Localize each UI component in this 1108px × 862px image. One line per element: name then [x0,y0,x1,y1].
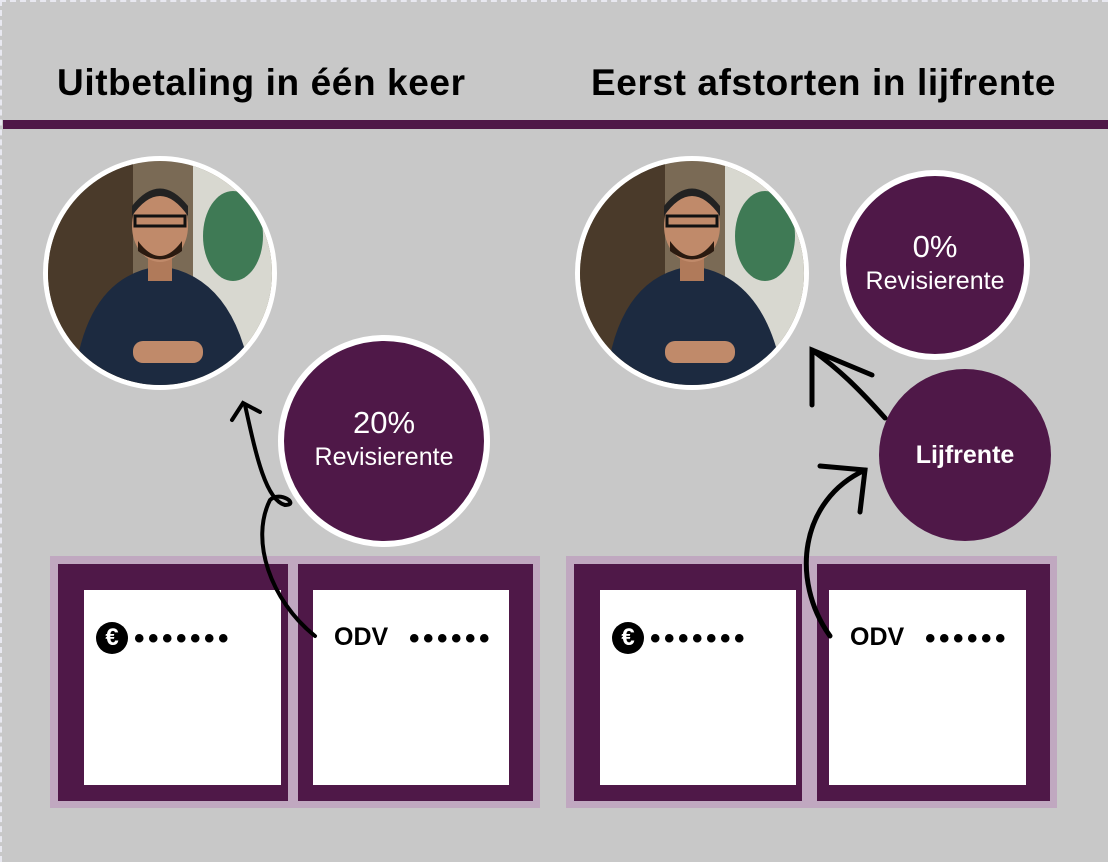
card: ODV: ODV [850,623,904,651]
photo: left [43,156,277,390]
card: euro [58,564,288,801]
circle: 0% Revisierente: 0% [913,228,957,264]
circle: Lijfrente: Lijfrente [916,440,1014,468]
card: euro: ••••••• [650,622,748,655]
card: ODV [817,564,1050,801]
icon: euro: € [105,624,119,651]
circle: 0% Revisierente [840,170,1030,360]
card: ODV: •••••• [925,622,1009,655]
arrow: ODV to lijfrente [806,466,865,636]
icon: euro: € [621,624,635,651]
card: euro [574,564,802,801]
circle: Lijfrente [879,369,1051,541]
photo: right [575,156,809,390]
header bar [3,120,1108,129]
circle: 0% Revisierente: Revisierente [866,266,1004,294]
cards: right [566,556,1057,808]
card: ODV: •••••• [409,622,493,655]
card: ODV [298,564,533,801]
icon: euro [612,622,644,654]
card: euro: ••••••• [134,622,232,655]
card: ODV: ODV [334,623,388,651]
arrow: ODV to photo left [232,403,315,636]
title: left: Uitbetaling in één keer [57,62,466,103]
title: right: Eerst afstorten in lijfrente [591,62,1056,103]
circle: 20% Revisierente: Revisierente [315,442,453,470]
arrow: lijfrente to photo right [812,350,885,418]
cards: left [50,556,540,808]
icon: euro [96,622,128,654]
circle: 20% Revisierente [278,335,490,547]
circle: 20% Revisierente: 20% [353,404,415,440]
